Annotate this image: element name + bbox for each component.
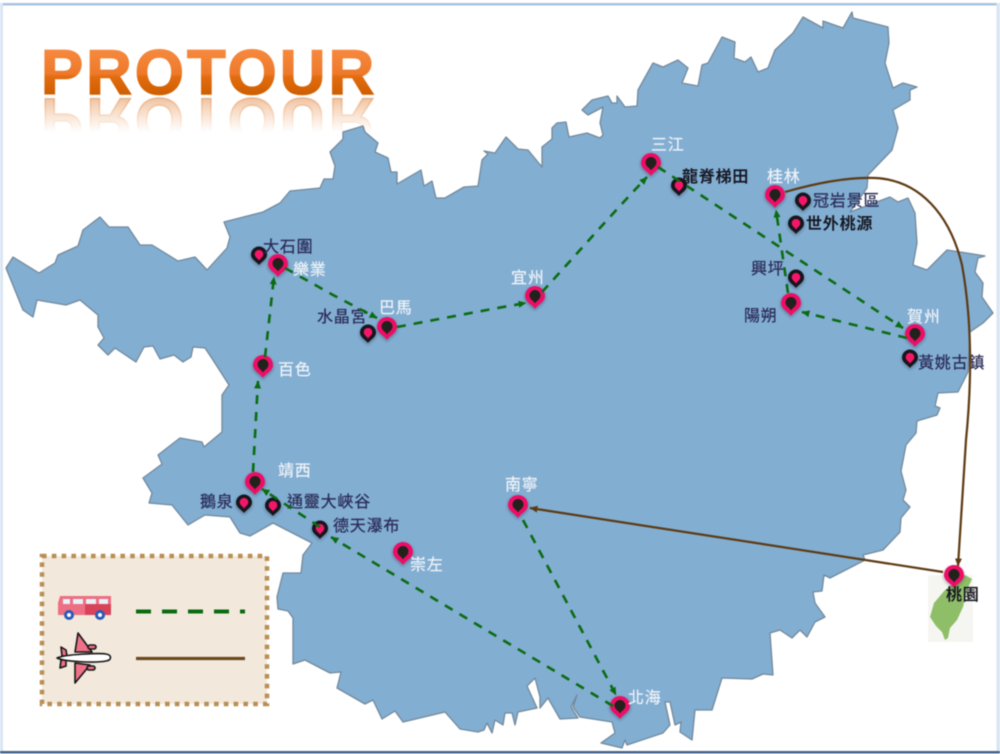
arrow: 桃園 to 南寧 flight	[530, 508, 943, 572]
pin and label: 通靈大峽谷: 通靈大峽谷	[287, 493, 371, 511]
pin and label: 興坪: 興坪	[751, 260, 785, 278]
arrow: 陽朔 to 桂林	[776, 210, 788, 293]
arrow: 巴馬 to 宜州	[397, 303, 526, 327]
pin and label: 大石圍: 大石圍	[263, 238, 313, 256]
pin and label: 龍脊梯田: 龍脊梯田	[682, 168, 749, 186]
arrow: 北海 to 德天瀑布	[331, 537, 613, 706]
pin and label: 水晶宮	[317, 308, 376, 343]
pin and label: 黃姚古鎮: 黃姚古鎮	[918, 354, 985, 372]
pin and label: 靖西: 靖西	[278, 462, 312, 480]
bus routes	[253, 167, 907, 706]
pin and label: 崇左: 崇左	[410, 556, 444, 574]
pin and label: 樂業	[268, 254, 327, 279]
pin and label: 水晶宮: 水晶宮	[317, 308, 367, 326]
pin and label: 樂業: 樂業	[293, 261, 327, 279]
icon: bus	[58, 596, 111, 620]
arrow: 桂林 to 桃園 flight	[785, 178, 970, 566]
flight routes	[530, 178, 970, 572]
pin and label: 百色	[253, 355, 312, 379]
pin and label: 百色: 百色	[278, 361, 312, 379]
pin and label: 北海: 北海	[628, 689, 662, 707]
title: PROTOUR with reflection	[41, 38, 377, 154]
pin and label: 桂林	[765, 168, 801, 208]
pin and label: 賀州: 賀州	[907, 308, 941, 326]
arrow: 百色 to 樂業	[265, 277, 274, 357]
pin and label: 三江	[641, 136, 685, 176]
taiwan inset map	[928, 575, 973, 642]
pin and label: 宜州	[511, 269, 545, 309]
title: PROTOUR with reflection: PROTOUR	[41, 38, 377, 108]
pin and label: 鵝泉	[200, 493, 252, 513]
pin and label: 通靈大峽谷	[265, 493, 371, 516]
pin and label: 陽朔	[744, 293, 801, 325]
arrow: 德天瀑布 to 靖西	[262, 489, 320, 527]
pin and label: 興坪	[751, 260, 804, 288]
pin and label: 宜州: 宜州	[511, 269, 545, 287]
pin and label: 靖西	[245, 462, 312, 495]
pin and label: 鵝泉: 鵝泉	[200, 493, 234, 511]
pin and label: 龍脊梯田	[671, 168, 749, 196]
pin and label: 桂林: 桂林	[767, 168, 801, 186]
pin and label: 賀州	[905, 308, 941, 347]
pin and label: 黃姚古鎮	[902, 350, 985, 372]
pin and label: 三江: 三江	[651, 136, 685, 154]
pin and label: 大石圍	[251, 238, 313, 265]
pin and label: 南寧	[505, 476, 539, 518]
arrow: 南寧 to 北海	[523, 520, 616, 695]
legend line: bus route	[136, 610, 245, 614]
pin and label: 世外桃源: 世外桃源	[806, 215, 873, 233]
legend line: flight route	[136, 657, 245, 660]
pin and label: 德天瀑布: 德天瀑布	[333, 516, 400, 535]
arrow: 靖西 to 百色	[253, 381, 258, 472]
arrow: 三江 to 賀州	[658, 167, 903, 328]
icon: plane	[57, 633, 110, 683]
pin and label: 巴馬: 巴馬	[379, 300, 413, 317]
pin and label: 冠岩景區: 冠岩景區	[813, 192, 880, 210]
pin and label: 桃園	[944, 565, 980, 604]
legend panel	[42, 556, 267, 704]
arrow: 樂業 to 巴馬	[285, 268, 377, 318]
pin and label: 北海	[610, 689, 662, 719]
pin and label: 陽朔: 陽朔	[744, 307, 778, 325]
pin and label: 巴馬	[377, 300, 413, 340]
pin and label: 南寧: 南寧	[505, 476, 539, 494]
arrow: 宜州 to 三江	[542, 177, 647, 292]
pin and label: 德天瀑布	[312, 516, 400, 539]
pin and label: 崇左	[393, 542, 444, 574]
arrow: 賀州 to 陽朔	[802, 312, 907, 338]
title: PROTOUR with reflection: PROTOUR	[41, 84, 377, 154]
pin and label: 桃園: 桃園	[946, 586, 980, 604]
